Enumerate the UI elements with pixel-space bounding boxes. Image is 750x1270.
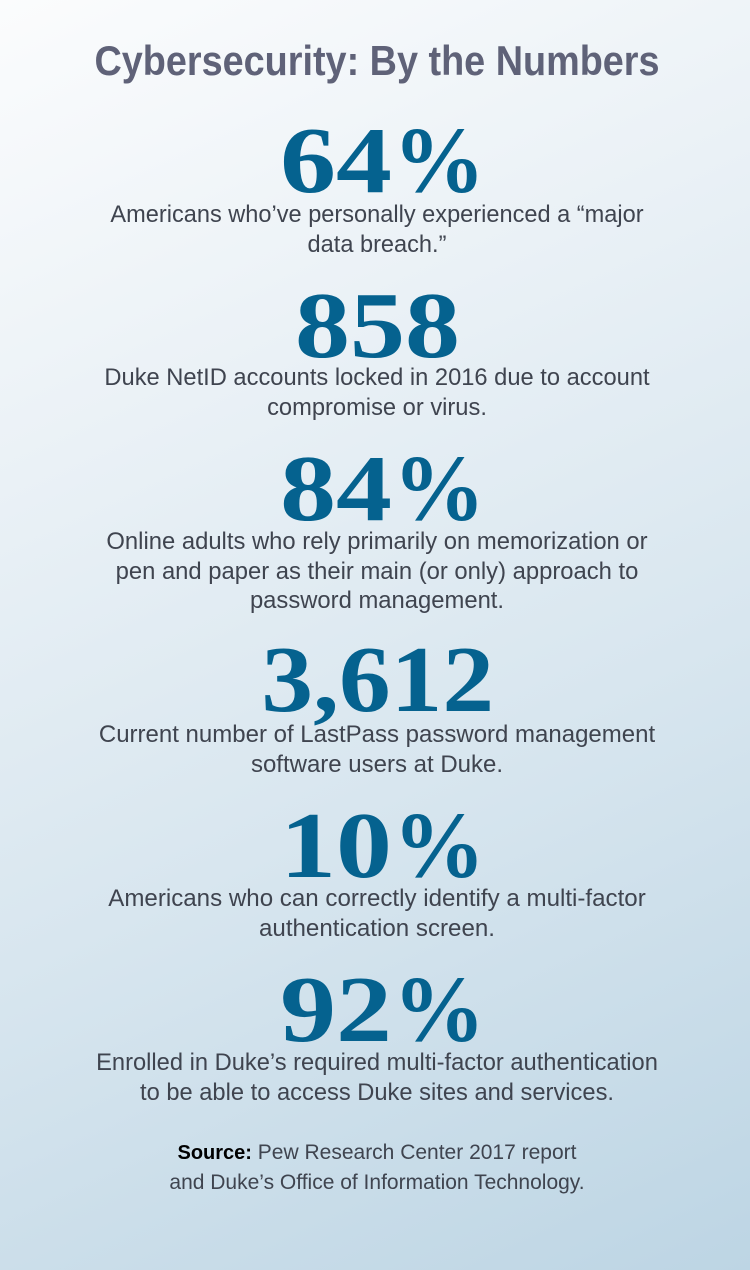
text: 84% description: pen and paper as their main (or only) approach to [116,558,638,584]
text: 858 description: compromise or virus. [267,394,487,420]
stat: 84% [280,437,485,541]
text: 84% description: password management. [250,587,504,614]
text: 858 description: Duke NetID accounts locked in 2016 due to account [104,364,650,391]
stat: 3,612: 3,612 [262,628,494,732]
title: Cybersecurity: By the Numbers [94,37,660,84]
text: 10% description: authentication screen. [259,914,495,942]
stat: 92%: 92 [280,958,391,1062]
text: 64% description: data breach.” [308,230,446,258]
text: 858 description [104,364,650,420]
text: 10% description: Americans who can correctly identify a multi-factor [108,885,646,912]
stat: 84%: 84 [280,437,391,541]
text: 84% description: Online adults who rely primarily on memorization or [106,528,648,555]
text: 10% description [108,885,646,942]
stat: 858: 858 [295,274,459,378]
stat: 10%: % [392,794,485,898]
stat: 64% [280,109,485,213]
text: 3,612 description [99,721,655,778]
source note: and Duke’s Office of Information Technology. [169,1171,585,1194]
text: 64% description: Americans who’ve personally experienced a “major [110,201,644,228]
text: 3,612 description: Current number of LastPass password management [99,721,655,748]
source note [169,1141,585,1194]
stat: 10% [280,794,485,898]
stat: 10%: 10 [280,794,391,898]
text: 92% description: Enrolled in Duke’s required multi-factor authentication [96,1049,658,1076]
stat: 92%: % [392,958,485,1062]
stat: 64%: % [392,109,485,213]
stat: 64%: 64 [280,109,391,213]
text: 3,612 description: software users at Duke. [251,750,503,778]
text: 92% description [96,1049,658,1106]
text: 64% description [110,201,644,258]
text: 84% description [106,528,648,614]
stat: 84%: % [392,437,485,541]
text: 92% description: to be able to access Duke sites and services. [140,1078,614,1106]
stat: 92% [280,958,485,1062]
source note: Source: Pew Research Center 2017 report [178,1141,576,1164]
